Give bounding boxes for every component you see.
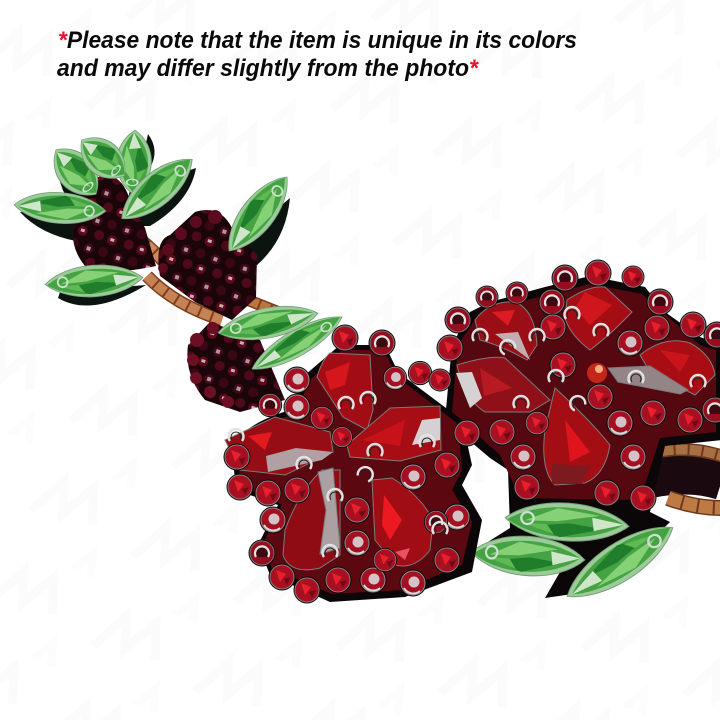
flower: left (224, 324, 482, 604)
stone: lower (544, 388, 610, 485)
small beads: left flower (224, 324, 480, 604)
heading note: and may differ slightly from the photo* (57, 55, 480, 82)
stone: left (225, 417, 333, 475)
flower backing (445, 276, 720, 598)
branch stems (130, 232, 278, 320)
stone: top (565, 287, 632, 350)
leaf: left (13, 189, 107, 227)
heading note (57, 27, 577, 82)
stone: lower right (372, 478, 433, 566)
leaf: lower left (44, 262, 144, 300)
stone: lower left (283, 468, 340, 570)
dark bead cluster: middle (158, 210, 257, 320)
stone: right (608, 341, 715, 395)
stone: upper left (475, 302, 537, 360)
silver clasps: right flower (472, 307, 706, 411)
leaf backings (20, 134, 290, 306)
right-hand branch with dark beads (648, 449, 720, 508)
green leaves over lower cluster (215, 299, 348, 380)
stone: top (317, 353, 373, 430)
illustration: jewelled flower branch (13, 127, 720, 612)
flower backing (232, 345, 482, 602)
silver clasps: left flower (228, 392, 448, 557)
flower underlayer (452, 284, 716, 500)
green leaves under right flower (470, 499, 683, 612)
stone: left kite (456, 357, 550, 412)
leaf: top cluster (42, 127, 203, 231)
green leaves (13, 127, 300, 300)
flower underlayer (238, 350, 472, 594)
stone: right kite (347, 406, 441, 461)
leaf: upper right (216, 167, 300, 261)
flower: right (436, 260, 720, 612)
heading note: *Please note that the item is unique in its colors (58, 27, 577, 54)
dark bead cluster: lower (187, 322, 285, 412)
dark bead cluster: upper left (73, 176, 156, 271)
small beads: right flower (436, 260, 720, 512)
